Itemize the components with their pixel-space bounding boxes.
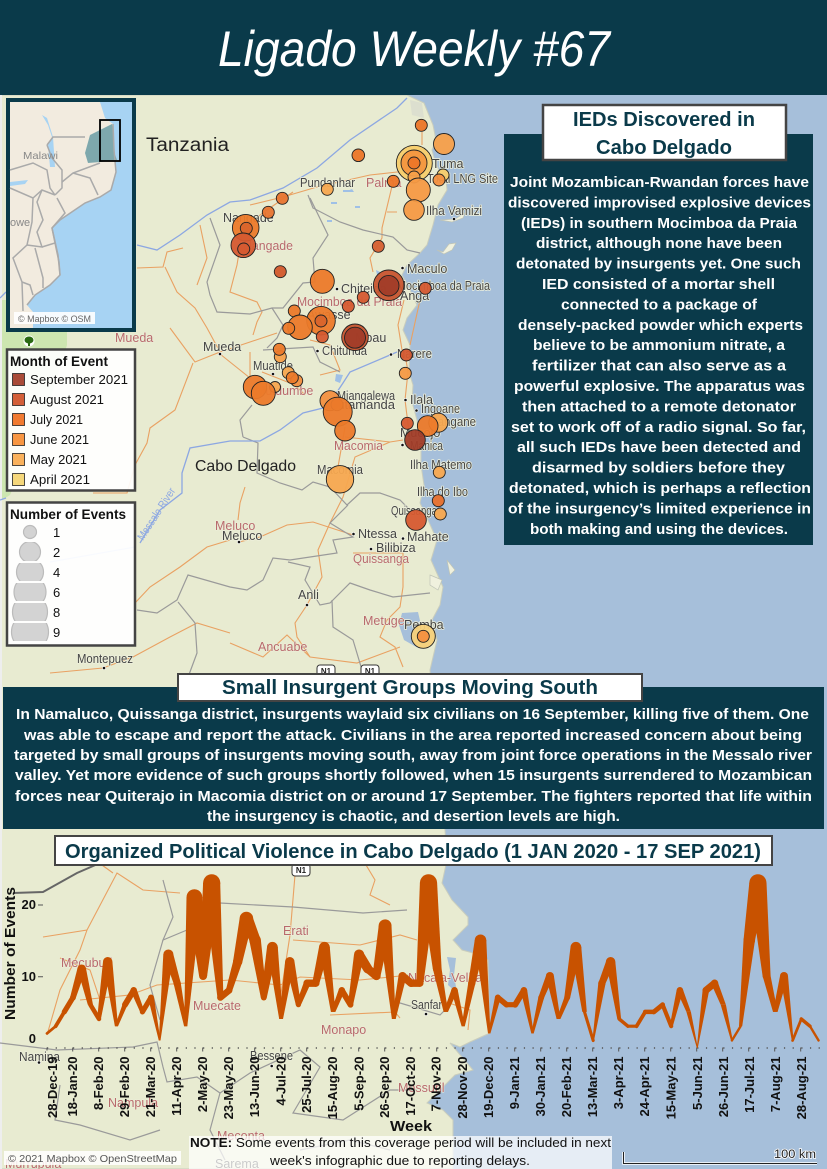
inset attribution: © Mapbox © OSM: [18, 314, 91, 325]
road network: [43, 132, 470, 1035]
map labels: Pundanhar: [300, 176, 355, 190]
map labels: Chiteida: [341, 282, 387, 296]
map labels: Manica: [410, 439, 443, 453]
map labels: Tuma: [432, 157, 464, 171]
x axis labels: 26-Jun-21: [716, 1056, 731, 1117]
legend: number of events: 1: [53, 525, 60, 540]
map labels: Ancuabe: [258, 640, 307, 654]
panel: IEDs discovered: both making and using the devices.: [530, 522, 788, 538]
inset map: [8, 100, 134, 330]
x axis labels: 28-Dec-19: [45, 1056, 60, 1118]
road shields: N1: [321, 667, 332, 676]
x axis labels: 29-Feb-20: [117, 1056, 132, 1117]
x axis labels: 18-Jan-20: [65, 1056, 80, 1116]
x axis labels: 21-Mar-20: [143, 1056, 158, 1117]
x axis labels: 23-May-20: [221, 1056, 236, 1119]
x axis labels: 7-Nov-20: [428, 1056, 444, 1111]
map labels: Mahate: [407, 530, 449, 544]
map labels: Narere: [397, 347, 432, 361]
map labels: Nampula: [108, 1096, 158, 1110]
road shields: N1: [365, 667, 376, 676]
panel: IEDs discovered: then attached to a remote detonator: [522, 399, 796, 415]
map labels: Messalo River: [135, 486, 178, 543]
map labels: Mossuril: [398, 1081, 445, 1095]
map labels: Mueda: [203, 340, 241, 354]
panel: IEDs discovered: [504, 134, 813, 545]
x axis labels: 9-Jan-21: [507, 1056, 522, 1109]
x axis labels: 28-Nov-20: [455, 1056, 470, 1119]
map labels: Pemba: [404, 618, 444, 632]
map labels: Chitamanda: [325, 398, 395, 412]
panel: IEDs discovered: (IEDs) in southern Mocimboa da Praia: [521, 216, 798, 232]
map attribution: © 2021 Mapbox © OpenStreetMap: [8, 1153, 177, 1165]
x axis labels: 4-Jul-20: [274, 1056, 288, 1106]
x axis labels: 7-Aug-21: [768, 1056, 783, 1112]
map labels: [5, 135, 498, 1169]
panel: IEDs discovered: discovered improvised explosive devices: [508, 195, 811, 211]
map labels: Mocimboa da Praia: [397, 279, 490, 293]
map labels: Awasse: [307, 308, 351, 322]
map labels: Maculo: [407, 262, 447, 276]
heading: small insurgent groups: [178, 674, 642, 701]
panel: small insurgent groups: valley. Yet more evidence of such groups shortly followed, when 15 insurgents surrendered to Mozambican: [15, 768, 812, 784]
y axis: 20: [22, 897, 36, 912]
map labels: Mocimboa da Praia: [297, 295, 402, 309]
heading: IEDs discovered: IEDs Discovered in: [573, 109, 755, 131]
panel: IEDs discovered: fertilizer that can also serve as a: [532, 359, 787, 375]
map labels: Anli: [298, 588, 319, 602]
panel: IEDs discovered: disarmed by soldiers before they: [532, 461, 785, 477]
map labels: Mueda: [115, 331, 153, 345]
legend: month of event: April 2021: [30, 472, 90, 487]
map labels: Mecuburi: [61, 956, 112, 970]
heading: small insurgent groups: Small Insurgent Groups Moving South: [222, 677, 598, 699]
scale bar: [624, 1149, 817, 1164]
note: NOTE: Some events from this coverage period will be included in next: [190, 1135, 611, 1150]
legend: number of events: [7, 502, 135, 650]
map labels: Chitunda: [322, 344, 367, 358]
x axis labels: 15-Aug-20: [325, 1056, 340, 1119]
line chart: weekly events: [2, 874, 820, 1135]
map labels: Nangade: [243, 239, 293, 253]
legend: month of event: June 2021: [30, 432, 89, 447]
map labels: Cabo Delgado: [195, 458, 296, 475]
scale bar: 100 km: [774, 1149, 816, 1161]
x axis labels: 17-Oct-20: [403, 1056, 418, 1116]
map labels: Tanzania: [146, 135, 229, 156]
panel: IEDs discovered: connected to a package of: [561, 297, 757, 313]
x axis labels: 17-Jul-21: [742, 1056, 757, 1113]
note: [189, 1135, 612, 1169]
panel: small insurgent groups: [3, 687, 824, 829]
map labels: Montepuez: [77, 652, 133, 666]
x axis labels: 30-Jan-21: [533, 1056, 548, 1116]
heading: IEDs discovered: Cabo Delgado: [596, 137, 732, 159]
legend: number of events: 2: [53, 545, 60, 560]
map labels: Nangade: [223, 211, 274, 225]
map labels: Ilha Matemo: [410, 458, 472, 472]
map labels: Bessene: [250, 1049, 293, 1063]
map labels: Metuge: [363, 614, 405, 628]
map labels: Mbau: [355, 331, 386, 345]
map labels: Ilala: [410, 393, 433, 407]
inset map: owe: [10, 217, 30, 229]
panel: IEDs discovered: powerful explosive. The apparatus was: [514, 379, 805, 395]
map labels: Total LNG Site: [427, 172, 498, 186]
legend: month of event: May 2021: [30, 452, 87, 467]
panel: IEDs discovered: believe to be ammonium nitrate, a: [533, 338, 786, 354]
y axis: Number of Events: [2, 887, 19, 1020]
x axis labels: Week: [390, 1118, 433, 1135]
map labels: Quissanga: [391, 504, 437, 518]
legend: number of events: Number of Events: [10, 507, 126, 522]
x axis labels: 26-Sep-20: [377, 1056, 392, 1118]
panel: IEDs discovered: Joint Mozambican-Rwandan forces have: [510, 175, 809, 191]
x axis labels: 24-Apr-21: [637, 1056, 652, 1116]
x axis labels: 28-Aug-21: [794, 1056, 809, 1119]
y axis: 0: [29, 1031, 36, 1046]
x axis labels: 5-Jun-21: [690, 1056, 705, 1110]
inset labels: Malawi: [23, 150, 58, 162]
legend: month of event: [7, 350, 135, 490]
map labels: Miangalewa: [337, 389, 395, 403]
legend: number of events: 4: [53, 565, 60, 580]
x axis labels: 13-Mar-21: [585, 1056, 600, 1117]
map labels: Erati: [283, 924, 309, 938]
map labels: Pangane: [430, 415, 476, 429]
map labels: Bilibiza: [376, 541, 416, 555]
event bubbles: [231, 119, 454, 648]
rivers: [0, 98, 407, 562]
title: Ligado Weekly #67: [218, 21, 612, 77]
panel: small insurgent groups: targeted by small groups of insurgents moving south, away from joint force operations in the Messalo river: [14, 748, 812, 764]
heading: IEDs discovered: [543, 105, 786, 160]
road shields: [292, 665, 379, 876]
panel: IEDs discovered: district, although none have been: [536, 236, 782, 252]
legend: month of event: September 2021: [30, 372, 128, 387]
panel: small insurgent groups: In Namaluco, Quissanga district, insurgents waylaid six civilians on 16 September, killing five of them. One: [16, 707, 809, 723]
legend: month of event: Month of Event: [10, 354, 108, 369]
map labels: Ntessa: [358, 527, 397, 541]
x axis labels: 5-Sep-20: [352, 1056, 366, 1111]
map labels: Nacala-Velha: [408, 971, 482, 985]
x axis labels: 8-Feb-20: [91, 1056, 106, 1110]
map labels: Ilha do Ibo: [417, 485, 468, 499]
map labels: Anga: [400, 289, 429, 303]
x axis labels: 3-Apr-21: [611, 1056, 626, 1109]
note: week's infographic due to reporting delays.: [269, 1153, 530, 1168]
legend: number of events: 8: [53, 605, 60, 620]
map labels: Palma: [366, 176, 401, 190]
panel: IEDs discovered: IED consisted of a mortar shell: [542, 277, 775, 293]
map labels: Muecate: [193, 999, 241, 1013]
map labels: Meluco: [215, 519, 255, 533]
y axis: 10: [22, 969, 36, 984]
x axis labels: 20-Feb-21: [559, 1056, 574, 1117]
x axis ticks: [47, 1048, 801, 1052]
x axis labels: [45, 1056, 809, 1135]
legend: month of event: July 2021: [30, 412, 83, 427]
map labels: Mucojo: [400, 426, 440, 440]
map labels: Macomia: [317, 463, 363, 477]
map labels: Muatide: [253, 359, 293, 373]
road shields: N1: [296, 866, 307, 875]
data line shallow segments: [47, 954, 819, 1040]
panel: IEDs discovered: all such IEDs have been detected and: [517, 440, 801, 456]
x axis labels: 13-Jun-20: [247, 1056, 262, 1117]
x axis labels: 11-Apr-20: [169, 1056, 184, 1116]
inset extent box: [100, 120, 120, 161]
map labels: Meluco: [222, 529, 262, 543]
map labels: Namina: [19, 1050, 60, 1064]
header bar: [0, 0, 827, 95]
y axis: [2, 887, 43, 1046]
map labels: Sanfar: [411, 998, 442, 1012]
map labels: Ingoane: [421, 402, 460, 416]
map labels: Macomia: [334, 439, 383, 453]
panel: IEDs discovered: densely-packed powder which experts: [518, 318, 803, 334]
legend: month of event: August 2021: [30, 392, 104, 407]
x axis labels: 19-Dec-20: [481, 1056, 496, 1118]
legend: number of events: 6: [53, 585, 60, 600]
panel: IEDs discovered: detonated, which is perhaps a reflection: [509, 481, 811, 497]
heading: chart title: Organized Political Violence in Cabo Delgado (1 JAN 2020 - 17 SEP 2021): [65, 841, 761, 863]
legend: number of events: 9: [53, 625, 60, 640]
panel: IEDs discovered: detonated by insurgents yet. One such: [516, 257, 801, 273]
panel: small insurgent groups: the insurgency is chaotic, and desertion levels are high.: [207, 809, 620, 825]
x axis labels: 15-May-21: [664, 1056, 678, 1119]
panel: small insurgent groups: was able to escape and report the attack. Civilians in the area reported increased concern about being: [23, 728, 802, 744]
map labels: Muidumbe: [255, 384, 313, 398]
town dots: [37, 217, 456, 1068]
map labels: Ilha Vamizi: [426, 204, 482, 218]
map labels: Quissanga: [353, 552, 409, 566]
icon: park tree: [24, 336, 34, 346]
map labels: Meconta: [217, 1129, 265, 1143]
x axis labels: 2-May-20: [195, 1056, 210, 1112]
panel: IEDs discovered: set to work off of a radio signal. So far,: [511, 420, 806, 436]
map labels: Monapo: [321, 1023, 366, 1037]
panel: small insurgent groups: forces near Quiterajo in Macomia district on or around 17 September. The fighters reported that life within: [15, 789, 812, 805]
boundaries: [0, 195, 450, 1160]
x axis labels: 25-Jul-20: [299, 1056, 314, 1113]
data line tapered segments: [70, 874, 794, 1048]
panel: IEDs discovered: of the insurgency’s limited experience in: [508, 501, 811, 517]
